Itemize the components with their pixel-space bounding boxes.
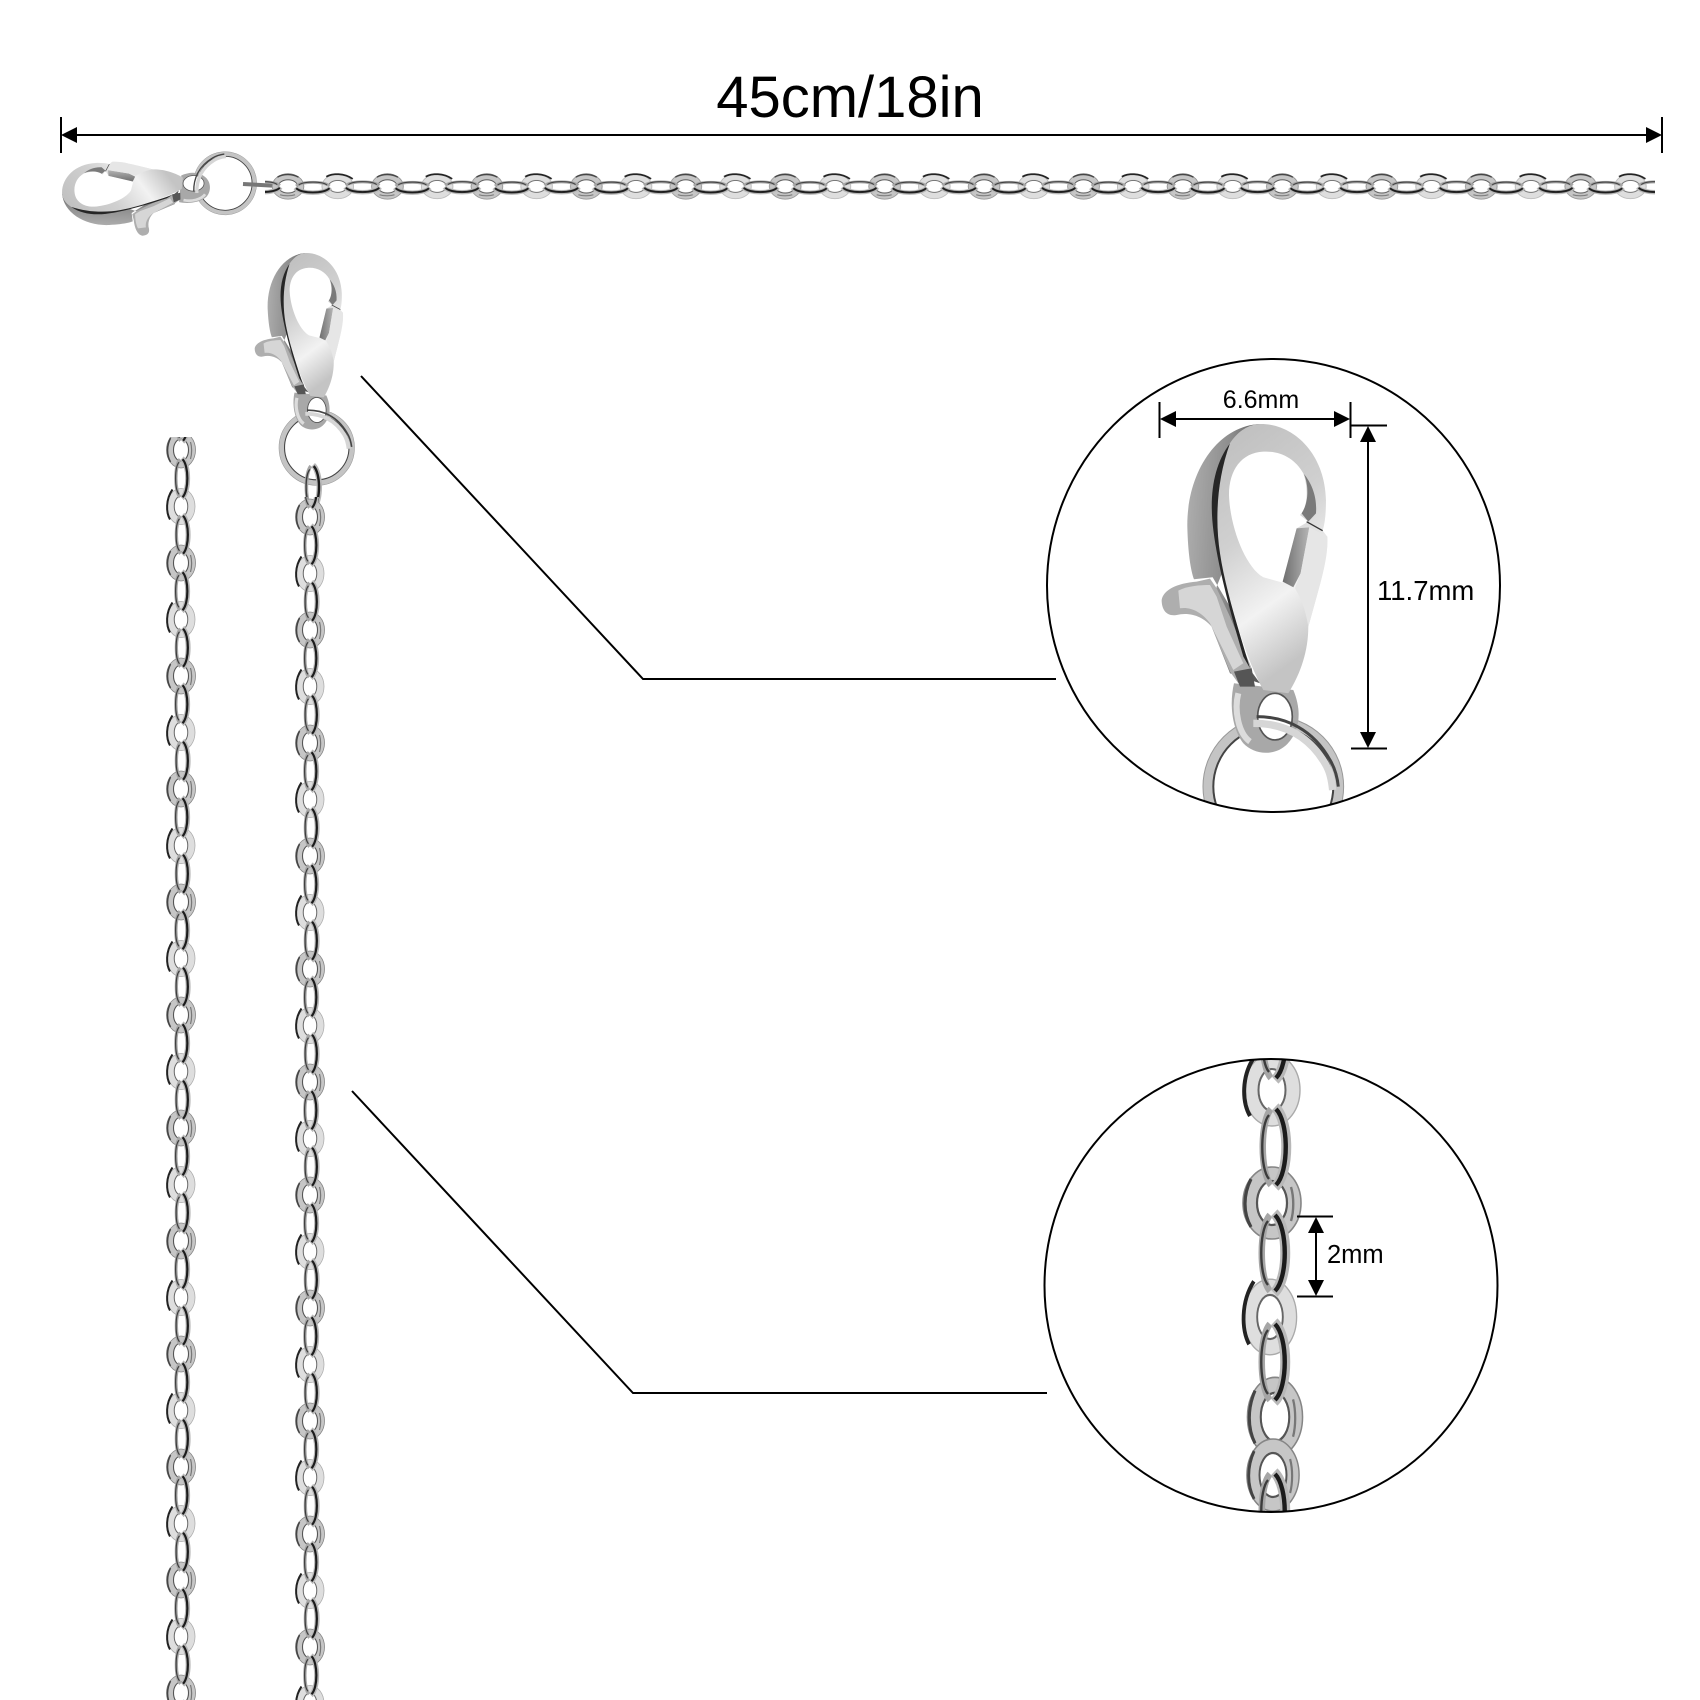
horizontal clasp <box>61 151 258 238</box>
horizontal chain with clasp <box>61 151 1655 238</box>
horizontal connector link <box>243 184 279 186</box>
enlarged chain <box>1242 1060 1304 1511</box>
leader line to chain detail <box>352 1091 1047 1393</box>
leader line to clasp detail <box>361 376 1056 679</box>
clasp width dimension <box>1160 386 1350 438</box>
right vertical chain with clasp <box>253 252 355 1700</box>
vertical connector link <box>306 465 319 509</box>
panel: chain detail <box>1044 1058 1498 1513</box>
horizontal chain links <box>265 170 1655 203</box>
length label: 45cm/18in <box>716 65 984 130</box>
vertical clasp <box>253 252 355 487</box>
link length dimension <box>1297 1216 1384 1296</box>
heading: total length dimension <box>61 65 1662 153</box>
panel: clasp detail <box>1047 359 1500 857</box>
vertical chain links <box>288 497 332 1700</box>
detail circle <box>1047 359 1500 812</box>
length arrow <box>61 117 1662 153</box>
left vertical chain <box>160 437 202 1700</box>
clasp height dimension: 11.7mm <box>1377 575 1474 606</box>
clasp width dimension: 6.6mm <box>1223 386 1299 414</box>
enlarged clasp <box>1162 424 1344 804</box>
detail circle <box>1044 1059 1498 1512</box>
link length dimension: 2mm <box>1327 1241 1384 1269</box>
clasp height dimension <box>1351 426 1474 748</box>
